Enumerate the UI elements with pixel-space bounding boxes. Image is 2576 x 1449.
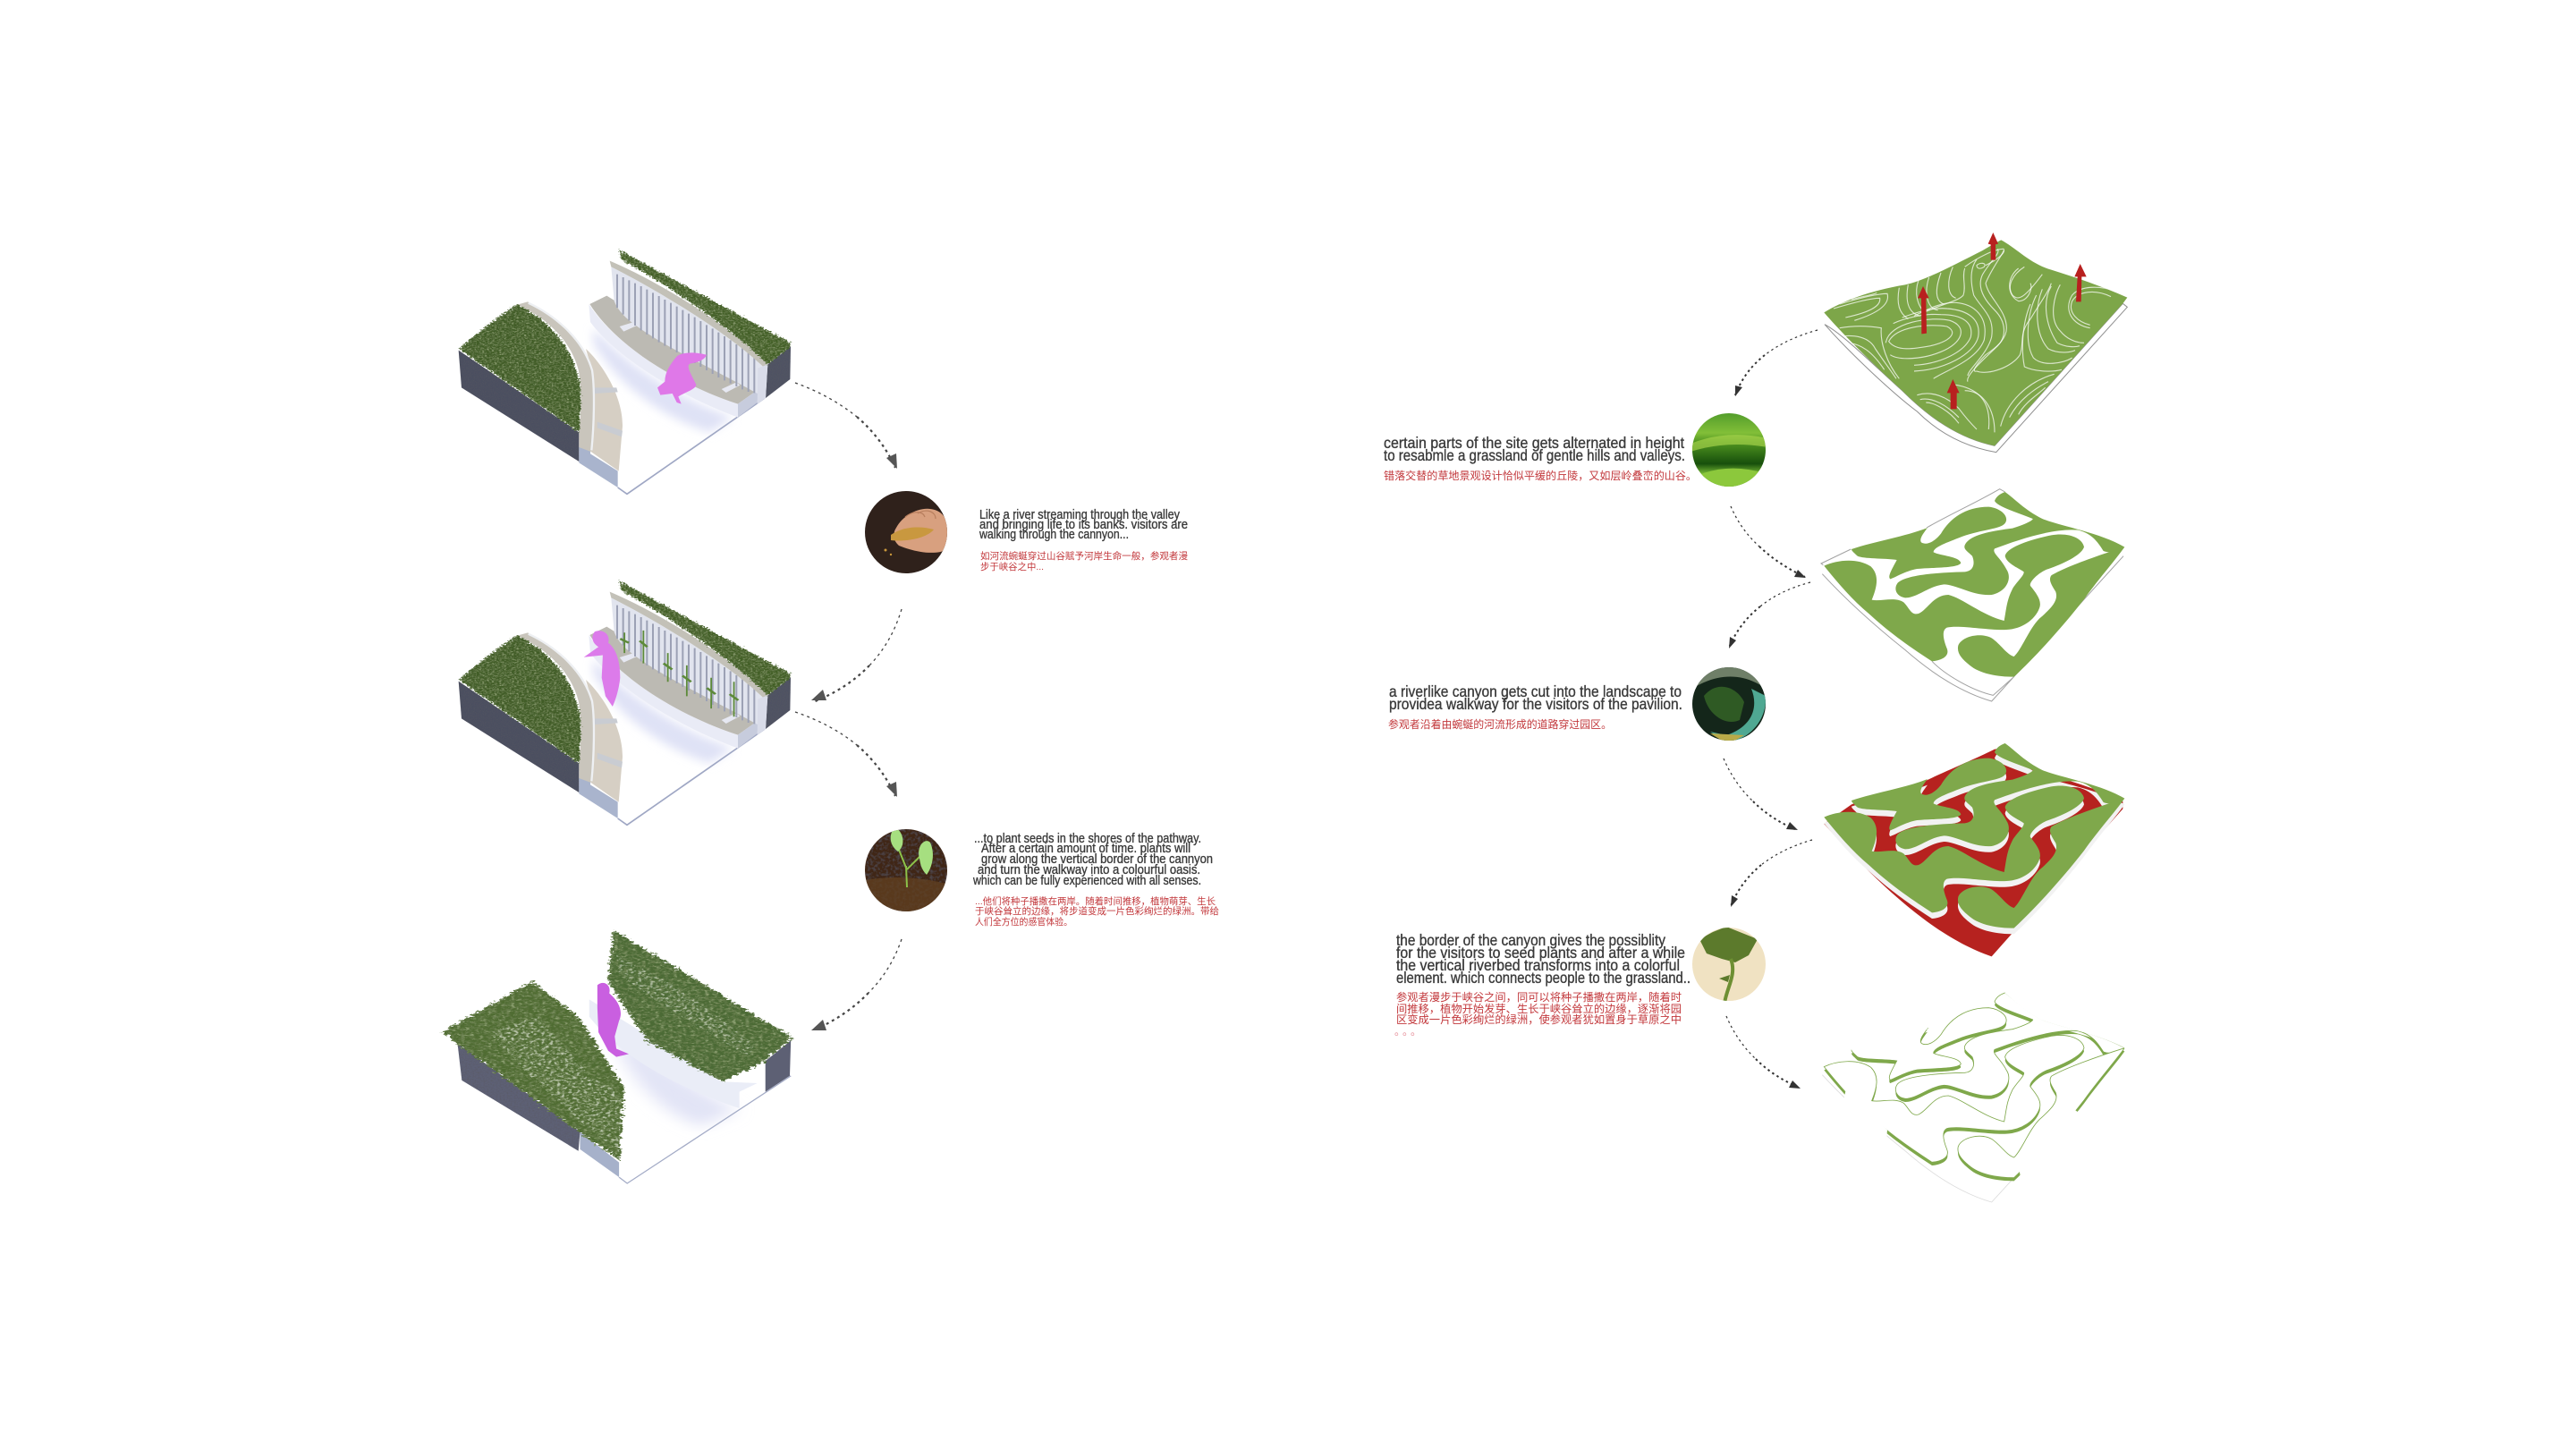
- english text: grow along the vertical border of the cannyon: [981, 852, 1213, 867]
- right grass: [619, 250, 791, 364]
- english text: and turn the walkway into a colourful oasis.: [978, 863, 1200, 877]
- icon: green hills: [1690, 411, 1767, 488]
- left wall: [458, 1044, 580, 1151]
- white cut regions with thin green rim: [1824, 993, 2124, 1178]
- green surface: [1824, 240, 2127, 445]
- planter front wall: [589, 304, 738, 418]
- icon: river canyon: [1692, 667, 1766, 741]
- chinese text: 区变成一片色彩绚烂的绿洲，使参观者犹如置身于草原之中: [1396, 1013, 1682, 1026]
- left meadow flowers: [489, 1016, 622, 1151]
- chinese text: [980, 550, 1189, 572]
- text block: seeding description: [1394, 931, 1690, 1038]
- white canyon walls: [1824, 750, 2124, 934]
- english text: element. which connects people to the grassland..: [1396, 969, 1690, 987]
- text block: river description: [979, 508, 1189, 572]
- green regions: [1824, 743, 2124, 928]
- walkway cross walls: [594, 387, 623, 436]
- english text: After a certain amount of time. plants will: [981, 842, 1191, 856]
- chinese text: 参观者漫步于峡谷之间，同可以将种子播撒在两岸，随着时: [1396, 990, 1682, 1004]
- sheet outline: [1821, 489, 2123, 701]
- right wall: [766, 1040, 791, 1092]
- person: standing visitor throwing seeds: [584, 631, 620, 707]
- red arrows: [1918, 233, 2087, 409]
- planter wall: [589, 999, 758, 1108]
- person: crouching visitor: [657, 352, 707, 404]
- left curb: [517, 301, 594, 452]
- english text: which can be fully experienced with all senses.: [972, 874, 1201, 888]
- english text: the vertical riverbed transforms into a colorful: [1396, 956, 1680, 974]
- curb rail: [529, 303, 594, 450]
- erased outer edges: [1852, 992, 2126, 1050]
- arrow 7: [1729, 582, 1810, 648]
- arrow 4: [811, 939, 902, 1030]
- arrow 2: [811, 609, 902, 702]
- english text: Like a river streaming through the valley: [979, 508, 1181, 522]
- floor shadow: [616, 1029, 738, 1127]
- left meadow: [443, 981, 624, 1159]
- english text: ...to plant seeds in the shores of the pathway.: [974, 832, 1201, 846]
- green wall offsets: [1824, 996, 2124, 1181]
- arrow 5: [1735, 330, 1818, 396]
- floor shadow: [593, 328, 733, 432]
- red base: [1824, 748, 2123, 956]
- chinese text: [975, 895, 1219, 928]
- english text: providea walkway for the visitors of the pavilion.: [1389, 695, 1682, 713]
- chinese text: 间推移，植物开始发芽、生长于峡谷耸立的边缘，逐渐将园: [1396, 1002, 1682, 1015]
- english text: walking through the cannyon...: [979, 528, 1129, 542]
- chinese text: 错落交替的草地景观设计恰似平缓的丘陵，又如层岭叠峦的山谷。: [1384, 469, 1697, 482]
- english text: [979, 508, 1188, 542]
- stepped walkway: [586, 349, 623, 471]
- chinese text: 。。。: [1394, 1025, 1421, 1038]
- english text: a riverlike canyon gets cut into the landscape to: [1389, 682, 1682, 700]
- block 3: section fully grown with meadow flowers: [443, 930, 792, 1183]
- block 1: empty canyon section: [459, 250, 791, 494]
- arrow 3: [795, 712, 897, 797]
- text block: canyon description: [1388, 682, 1682, 731]
- floor edge: [619, 1076, 791, 1183]
- left front facade: [580, 1131, 619, 1177]
- terrain 1: contoured green landscape with red arrows: [1824, 233, 2127, 453]
- arrow 6: [1731, 506, 1806, 578]
- english text: and bringing life to its banks. visitors are: [979, 518, 1188, 532]
- fence: [611, 267, 767, 394]
- block 2 base: [459, 580, 791, 825]
- right wall: [766, 346, 791, 398]
- terrain 3: green landscape with red canyon floor and white walls: [1824, 743, 2124, 956]
- english text: [1384, 434, 1685, 464]
- block 2: section with young plants (base repeated): [459, 580, 791, 825]
- stone strip: [610, 261, 767, 369]
- fence slats: [617, 275, 754, 393]
- green regions: [1824, 492, 2124, 677]
- sheet outline: [1822, 1075, 2014, 1202]
- young climbing plants: [620, 631, 738, 716]
- chinese text: [1394, 990, 1682, 1038]
- terrain 2: green landscape with white riverlike cut: [1821, 489, 2124, 701]
- left grass: [459, 305, 580, 432]
- icon: sprout in soil: [865, 829, 947, 911]
- contour lines: [1834, 249, 2114, 432]
- arrow 1: [795, 383, 897, 469]
- right meadow: [608, 930, 792, 1081]
- english text: certain parts of the site gets alternated in height: [1384, 434, 1684, 452]
- left wall: [459, 351, 579, 462]
- chinese text: 人们全方位的感官体验。: [975, 916, 1072, 928]
- english text: to resabmle a grassland of gentle hills and valleys.: [1384, 446, 1685, 464]
- column: [758, 364, 767, 404]
- english text: [1396, 931, 1690, 987]
- left front facade: [579, 440, 618, 487]
- chinese text: 于峡谷耸立的边缘，将步道变成一片色彩绚烂的绿洲。带给: [975, 905, 1219, 917]
- right meadow flowers: [616, 954, 755, 1057]
- terrain 4: vertical green border lines only: [1822, 992, 2126, 1202]
- planter cross walls: [620, 321, 740, 393]
- text block: height alteration description: [1384, 434, 1697, 482]
- english text: [972, 832, 1213, 888]
- chinese text: 步于峡谷之中...: [980, 561, 1044, 572]
- arrow 9: [1731, 840, 1812, 907]
- arrow 10: [1726, 1016, 1801, 1089]
- text block: planting seeds description: [972, 832, 1219, 928]
- person: standing visitor: [597, 983, 629, 1057]
- lower sheet: [1825, 303, 2127, 453]
- floor edge: [618, 398, 765, 494]
- faded lower edges: [1843, 1091, 2078, 1182]
- planter end: [738, 389, 758, 418]
- icon: hand with seeds: [863, 489, 950, 575]
- english text: the border of the canyon gives the possiblity: [1396, 931, 1665, 949]
- chinese text: 参观者沿着由蜿蜒的河流形成的道路穿过园区。: [1388, 717, 1612, 731]
- english text: for the visitors to seed plants and after a while: [1396, 944, 1685, 962]
- planter bed: [589, 296, 758, 404]
- english text: [1389, 682, 1682, 713]
- chinese text: ...他们将种子播撒在两岸。随着时间推移，植物萌芽、生长: [975, 895, 1216, 907]
- icon: growing tree: [1692, 928, 1766, 1001]
- chinese text: 如河流蜿蜒穿过山谷赋予河岸生命一般，参观者漫: [980, 550, 1189, 562]
- arrow 8: [1724, 758, 1798, 830]
